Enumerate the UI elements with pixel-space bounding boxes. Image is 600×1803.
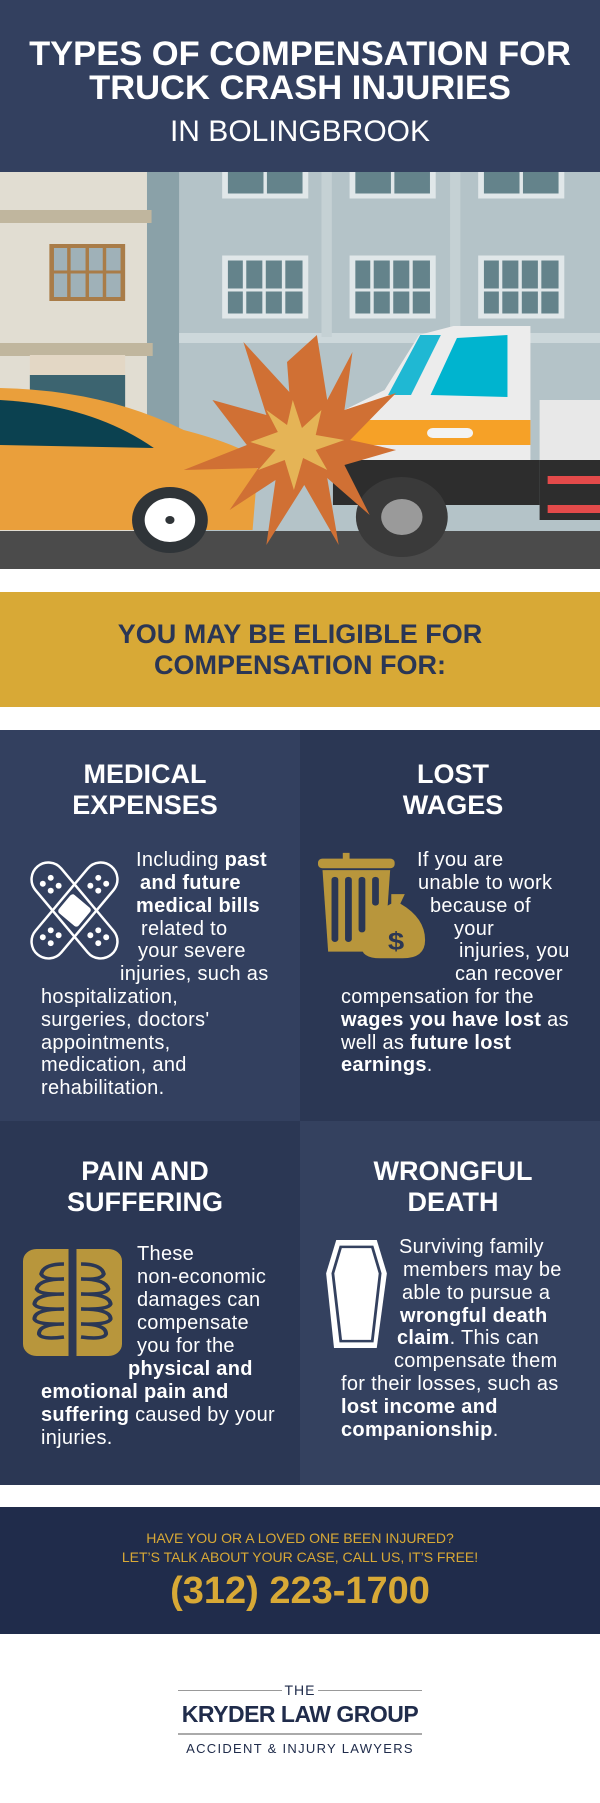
panel: pain and suffering: non-economic — [137, 1266, 266, 1288]
banner: eligible: COMPENSATION FOR: — [154, 650, 446, 680]
panel: lost wages: injuries, you — [459, 940, 570, 962]
heading: wrongful death: WRONGFUL — [374, 1156, 532, 1186]
panel: lost wages: your — [454, 918, 494, 940]
cta text: LET’S TALK ABOUT YOUR CASE, CALL US, IT’S FREE! — [122, 1549, 478, 1565]
panel: lost wages: earnings. — [341, 1054, 433, 1076]
heading: wrongful death — [374, 1156, 532, 1217]
car — [0, 388, 258, 553]
heading: pain and suffering — [67, 1156, 223, 1217]
heading: wrongful death: DEATH — [408, 1187, 498, 1217]
panel: pain and suffering: These — [137, 1243, 194, 1265]
panel: lost wages: compensation for the — [341, 986, 534, 1008]
panel: pain and suffering: injuries. — [41, 1427, 113, 1449]
text: lost wages — [340, 849, 570, 1076]
icon: bandages — [30, 861, 119, 960]
panel: lost wages: can recover — [455, 963, 563, 985]
heading: lost wages: WAGES — [403, 790, 503, 820]
panel: medical expenses: Including past — [136, 849, 267, 871]
panel: pain and suffering: suffering caused by your — [41, 1404, 275, 1426]
panel: wrongful death: members may be — [403, 1259, 562, 1281]
panel: pain and suffering: damages can — [137, 1289, 260, 1311]
icon: x-ray ribcage — [23, 1249, 122, 1356]
panel: medical expenses: injuries, such as — [120, 963, 268, 985]
heading: pain and suffering: SUFFERING — [67, 1187, 223, 1217]
panel: wrongful death: compensate them — [394, 1350, 557, 1372]
cta text: HAVE YOU OR A LOVED ONE BEEN INJURED? — [146, 1530, 454, 1546]
panel: medical expenses: and future — [140, 872, 241, 894]
panel: lost wages: wages you have lost as — [341, 1009, 569, 1031]
call to action — [0, 1507, 600, 1634]
logo — [178, 1682, 422, 1756]
panel: wrongful death: able to pursue a — [402, 1282, 550, 1304]
banner: eligible: YOU MAY BE ELIGIBLE FOR — [118, 619, 482, 649]
panel: lost wages — [300, 730, 600, 1121]
panel: lost wages: unable to work — [418, 872, 552, 894]
panel: lost wages: well as future lost — [341, 1032, 511, 1054]
panel: wrongful death: claim. This can — [397, 1327, 539, 1349]
title — [29, 35, 571, 107]
banner: eligible — [0, 592, 600, 707]
panel: medical expenses — [0, 730, 300, 1121]
panel: wrongful death: Surviving family — [399, 1236, 544, 1258]
panel: medical expenses: medical bills — [136, 895, 260, 917]
title: TYPES OF COMPENSATION FOR — [29, 35, 571, 73]
panel: pain and suffering — [0, 1121, 300, 1485]
explosion — [184, 335, 396, 545]
panel: medical expenses: your severe — [138, 940, 246, 962]
text: wrongful death — [341, 1236, 562, 1441]
heading: medical expenses: EXPENSES — [72, 790, 218, 820]
heading: pain and suffering: PAIN AND — [81, 1156, 209, 1186]
text: pain — [41, 1243, 275, 1449]
title: TRUCK CRASH INJURIES — [89, 69, 511, 107]
panel: pain and suffering: you for the — [137, 1335, 235, 1357]
panel: medical expenses: surgeries, doctors' — [41, 1009, 209, 1031]
subtitle: IN BOLINGBROOK — [170, 115, 430, 148]
truck — [333, 326, 600, 557]
panel: medical expenses: hospitalization, — [41, 986, 178, 1008]
panel: pain and suffering: physical and — [128, 1358, 253, 1380]
logo: THE — [284, 1682, 316, 1698]
logo: KRYDER LAW GROUP — [182, 1701, 418, 1727]
heading: lost wages — [402, 759, 503, 820]
text: medical — [41, 849, 268, 1099]
panel: medical expenses: related to — [141, 918, 227, 940]
panel: wrongful death — [300, 1121, 600, 1485]
panel: wrongful death: lost income and — [341, 1396, 498, 1418]
phone number: (312) 223-1700 — [170, 1570, 430, 1612]
header — [0, 0, 600, 172]
panel: wrongful death: companionship. — [341, 1419, 499, 1441]
panel: lost wages: If you are — [417, 849, 503, 871]
logo: ACCIDENT & INJURY LAWYERS — [186, 1741, 414, 1756]
panel: medical expenses: medication, and — [41, 1054, 187, 1076]
panel: medical expenses: rehabilitation. — [41, 1077, 164, 1099]
panel: wrongful death: for their losses, such as — [341, 1373, 559, 1395]
heading: lost wages: LOST — [417, 759, 489, 789]
icon: trash can and money bag — [318, 852, 426, 958]
heading: medical expenses — [72, 759, 218, 820]
icon: coffin — [326, 1240, 387, 1348]
icon: trash can and money bag: $ — [388, 927, 404, 955]
panel: lost wages: because of — [430, 895, 531, 917]
panel: wrongful death: wrongful death — [400, 1305, 548, 1327]
panel: pain and suffering: emotional pain and — [41, 1381, 229, 1403]
panel: pain and suffering: compensate — [137, 1312, 249, 1334]
panel: medical expenses: appointments, — [41, 1032, 171, 1054]
heading: medical expenses: MEDICAL — [84, 759, 206, 789]
cta text — [122, 1530, 478, 1565]
illustration: truck crash — [0, 172, 600, 569]
